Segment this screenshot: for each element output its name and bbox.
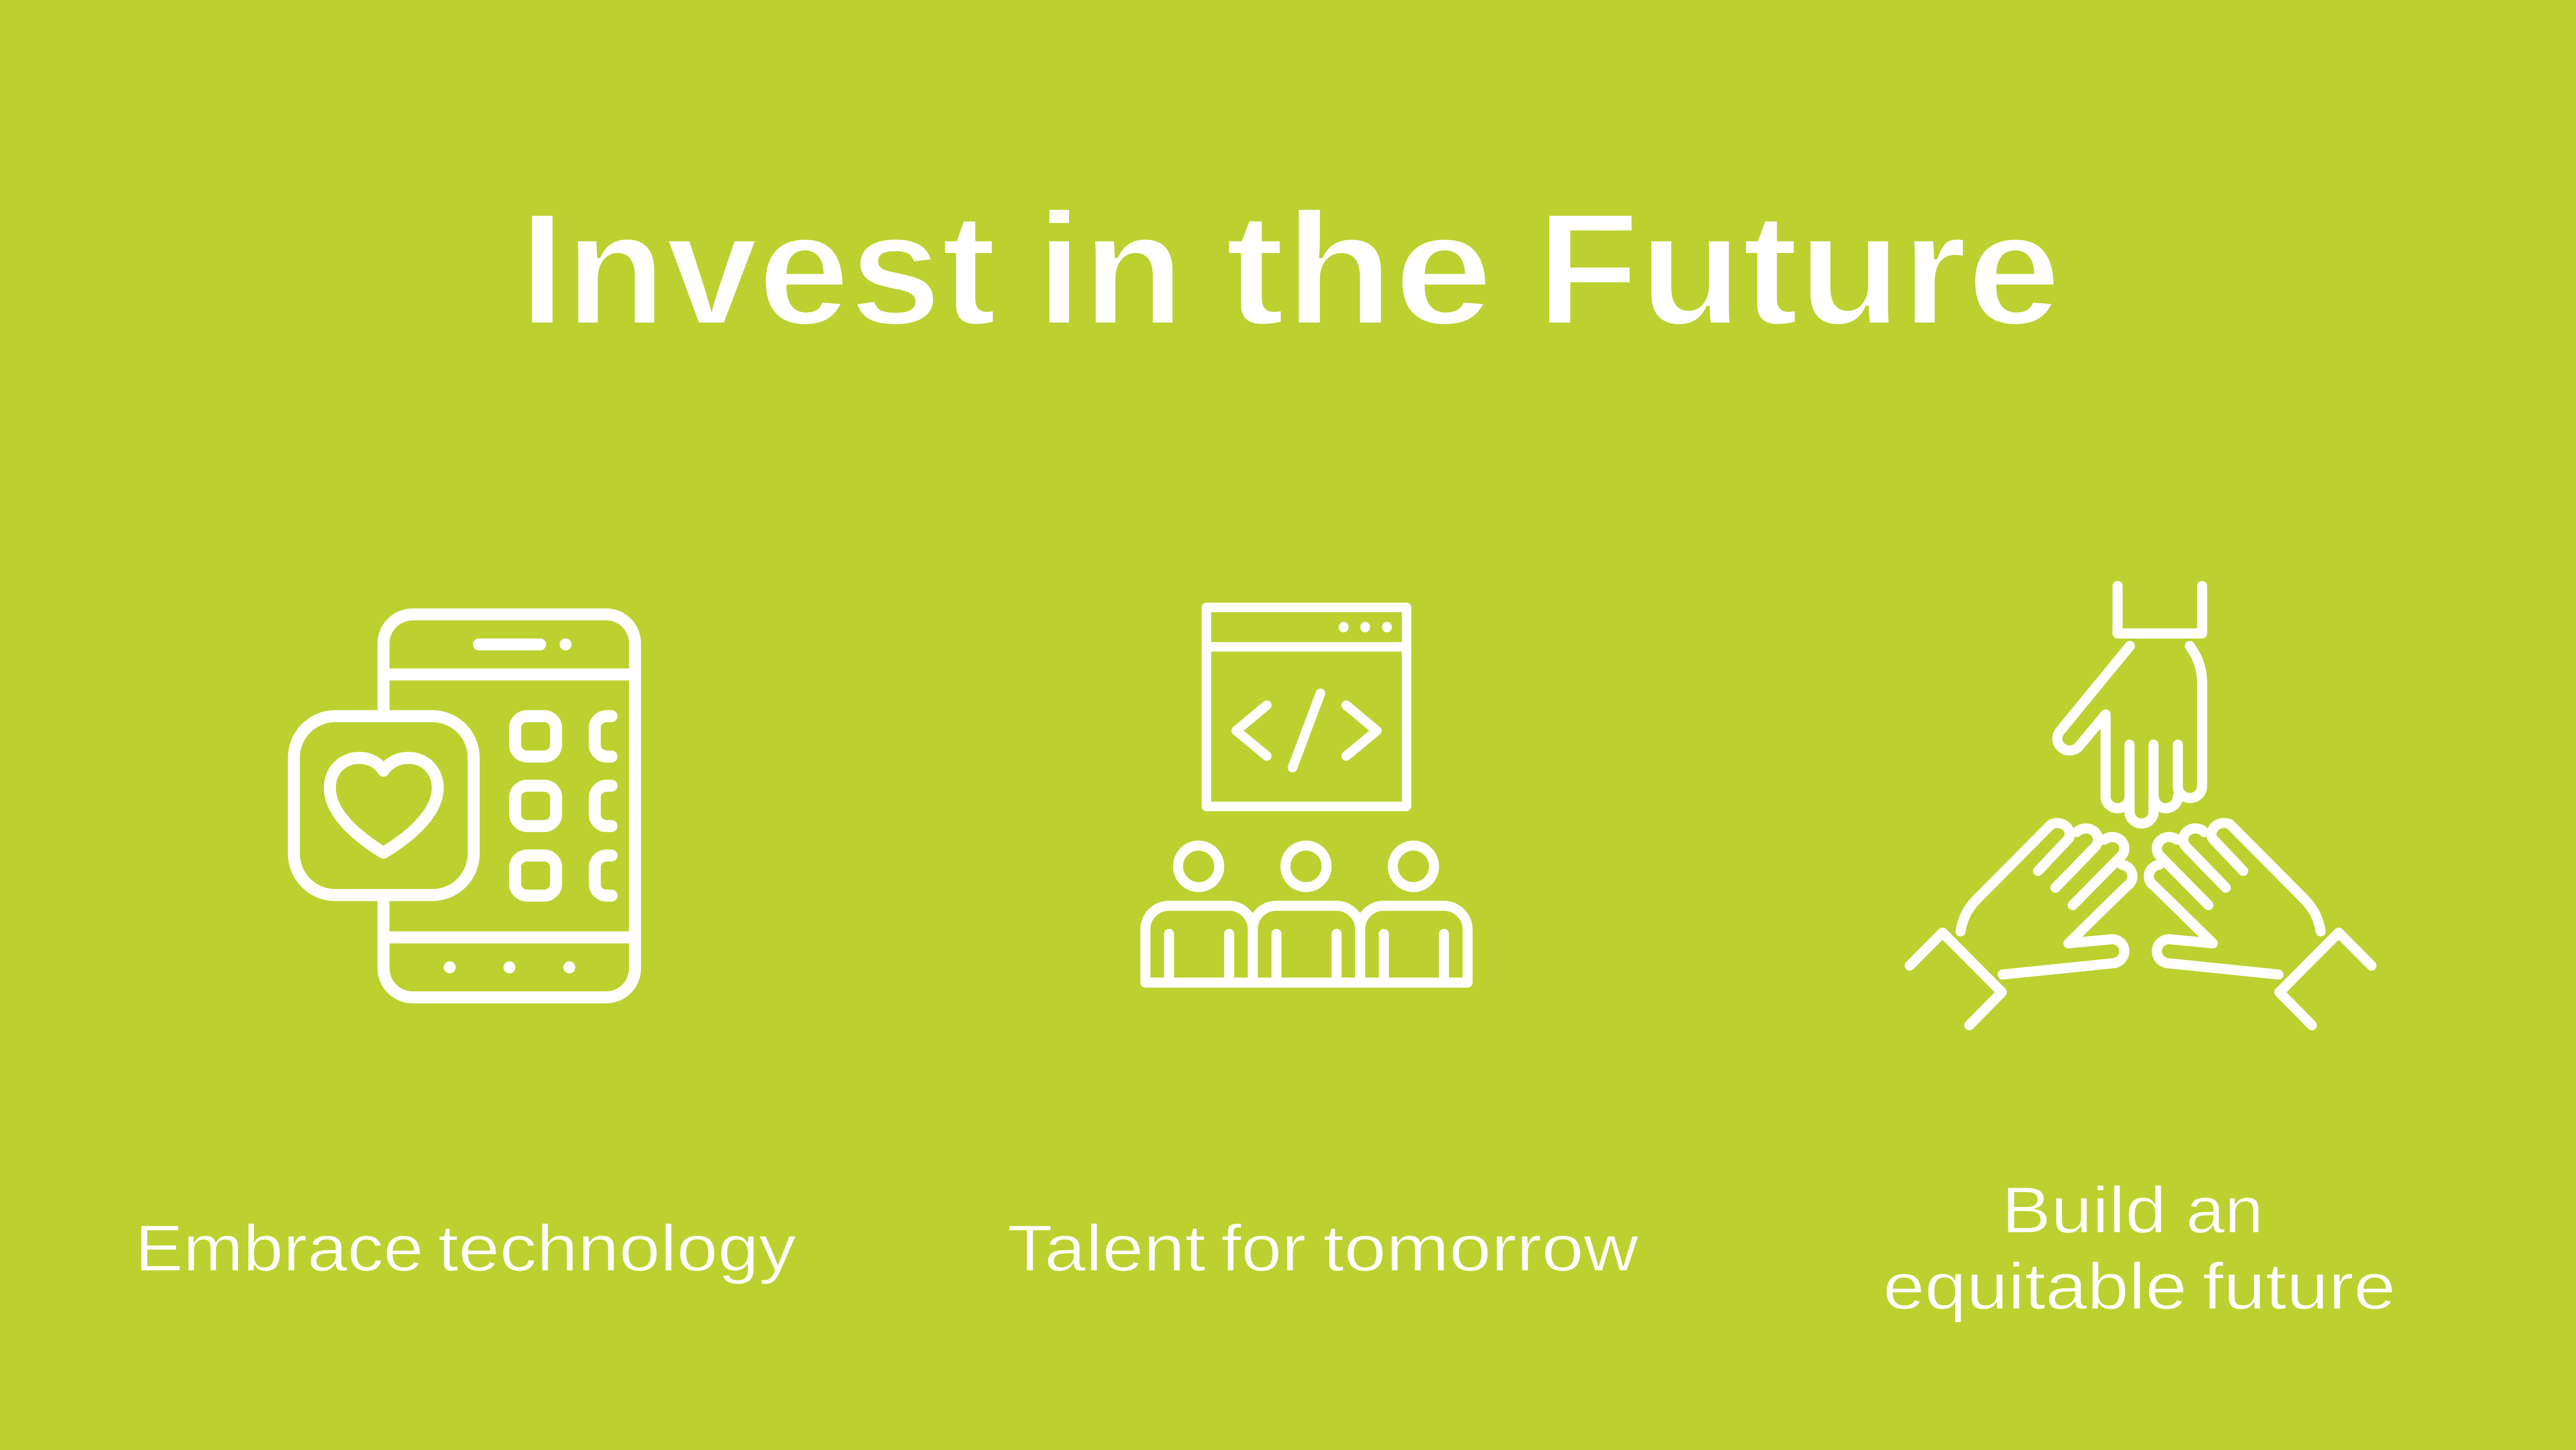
phone dots	[444, 638, 575, 973]
panel: embrace technology	[135, 614, 796, 1285]
title: Future	[1536, 179, 2061, 358]
panel: talent for tomorrow	[1007, 608, 1639, 1285]
icon: code window above three people	[1145, 608, 1468, 983]
title: Invest	[519, 179, 996, 358]
label: embrace technology: technology	[438, 1211, 796, 1285]
label: talent for tomorrow: tomorrow	[1323, 1211, 1639, 1285]
label: build an equitable future: Build	[2002, 1173, 2166, 1246]
people heads	[1178, 846, 1434, 887]
title: in	[1036, 179, 1184, 358]
label: talent for tomorrow: Talent	[1007, 1211, 1206, 1285]
phone speaker	[479, 638, 540, 650]
top hand	[2057, 586, 2202, 823]
window dots	[1338, 622, 1392, 632]
left hand	[1910, 823, 2132, 1025]
label: build an equitable future: equitable	[1883, 1250, 2187, 1323]
heart	[330, 758, 438, 853]
icon: smartphone and smartwatch with heart	[294, 614, 635, 998]
phone body	[383, 614, 635, 998]
title: the	[1225, 179, 1493, 358]
right hand	[2149, 823, 2371, 1025]
app tiles	[515, 716, 612, 896]
label: build an equitable future: future	[2202, 1250, 2396, 1323]
watch face	[294, 716, 473, 895]
panel: build an equitable future	[1883, 586, 2396, 1323]
label: build an equitable future: an	[2186, 1173, 2263, 1246]
label: embrace technology: Embrace	[135, 1211, 423, 1285]
label: talent for tomorrow: for	[1221, 1211, 1306, 1285]
code symbol	[1236, 694, 1377, 767]
people bodies	[1145, 906, 1468, 983]
icon: three joined hands	[1910, 586, 2371, 1025]
code window	[1207, 608, 1406, 806]
